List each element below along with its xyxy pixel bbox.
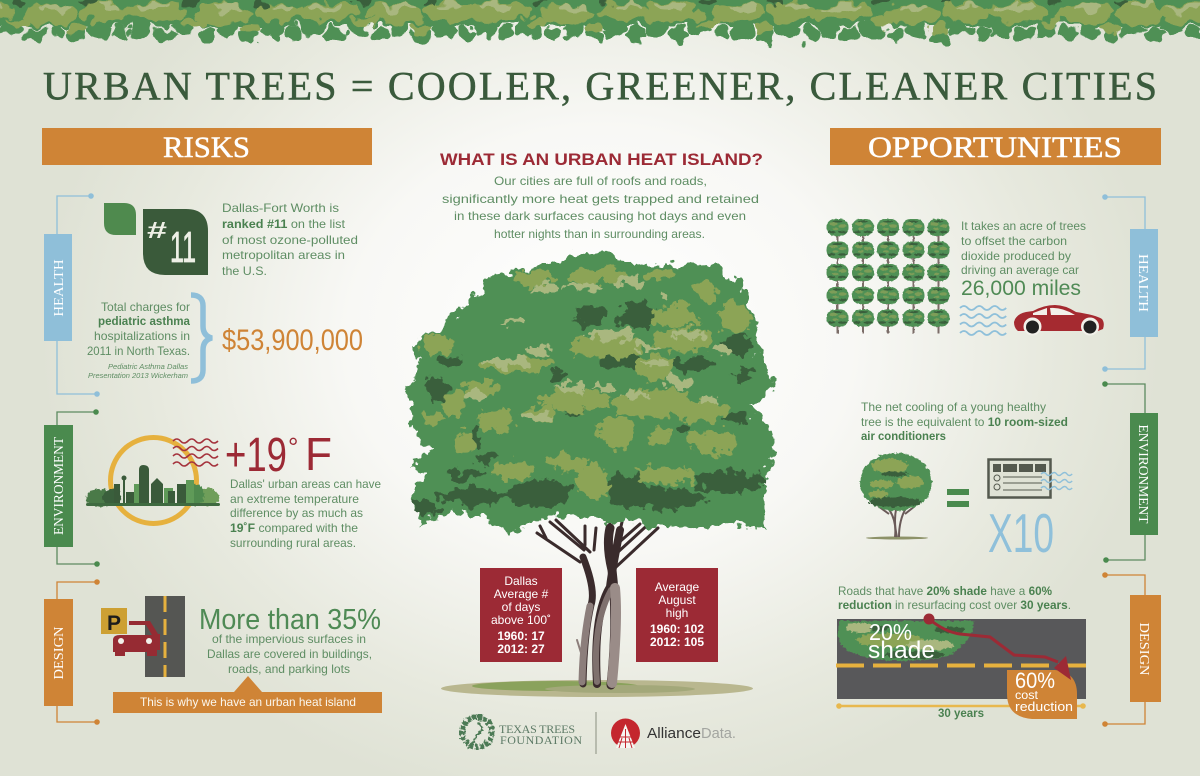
text: heat island explanation <box>442 174 759 241</box>
text: carbon offset <box>961 219 1086 277</box>
illustration: large tree <box>407 252 777 697</box>
chart: shaded road <box>836 614 1087 720</box>
text: asthma charges: Presentation 2013 Wickerham <box>88 371 188 380</box>
text: net cooling <box>861 400 1068 443</box>
text: temperature difference: an extreme temperature <box>230 492 359 506</box>
opportunities health bracket <box>1102 194 1158 372</box>
stat box: days above 100: 2012: 27 <box>497 642 545 656</box>
stat box: days above 100: above 100˚ <box>491 613 551 627</box>
heading: risks <box>42 128 372 165</box>
risks design bracket <box>44 579 100 725</box>
risks environment bracket <box>44 409 100 567</box>
text: asthma charges <box>87 300 190 380</box>
divider <box>595 712 597 754</box>
stat box: days above 100: Dallas <box>504 574 538 588</box>
text: asthma charges: 2011 in North Texas. <box>87 344 190 358</box>
stat box: days above 100: 1960: 17 <box>497 629 545 643</box>
text: ozone ranking: metropolitan areas in <box>222 248 345 262</box>
heading: opportunities: OPPORTUNITIES <box>868 131 1122 164</box>
icon: equals sign <box>947 489 969 507</box>
stat: asthma cost: $53,900,000 <box>222 324 363 357</box>
risks design bracket: DESIGN <box>52 626 67 680</box>
opportunities design bracket: DESIGN <box>1136 622 1151 676</box>
text: ozone ranking <box>222 201 358 278</box>
callout: heat island banner: This is why we have an urban heat island <box>140 695 356 709</box>
stat: temperature: F <box>305 428 332 480</box>
icon: grid of 25 trees <box>826 219 950 334</box>
text: ozone ranking: Dallas-Fort Worth is <box>222 201 339 215</box>
chart: shaded road: 20% <box>869 619 912 645</box>
text: carbon offset: It takes an acre of trees <box>961 219 1086 233</box>
text: heat island explanation: significantly more heat gets trapped and retained <box>442 192 759 206</box>
risks environment bracket: ENVIRONMENT <box>52 437 67 535</box>
logo: alliance data: Data. <box>701 725 736 742</box>
logo: alliance data <box>611 718 736 748</box>
text: road shade: Roads that have 20% shade have a 60% <box>838 584 1052 598</box>
risks health bracket: HEALTH <box>52 260 67 316</box>
icon: rank leaf: 11 <box>170 223 196 272</box>
stat: temperature: +19 <box>225 429 287 482</box>
text: carbon offset: to offset the carbon <box>961 234 1067 248</box>
text: temperature difference: Dallas' urban areas can have <box>230 477 381 491</box>
panel: urban heat island <box>407 151 777 754</box>
text: carbon offset: dioxide produced by <box>961 249 1071 263</box>
icon: young tree <box>860 453 932 540</box>
text: ozone ranking: of most ozone-polluted <box>222 233 358 247</box>
canopy <box>407 252 777 532</box>
text: ozone ranking: ranked #11 on the list <box>222 217 346 231</box>
stat box: average august high: 2012: 105 <box>650 635 704 649</box>
text: impervious surfaces: roads, and parking lots <box>228 662 350 676</box>
opportunities health bracket: HEALTH <box>1135 254 1150 312</box>
text: net cooling: tree is the equivalent to 10 room-sized <box>861 415 1068 429</box>
stat: times ten: X10 <box>988 502 1054 564</box>
icon: heat waves <box>173 439 218 466</box>
text: impervious surfaces <box>207 632 372 676</box>
text: temperature difference: 19˚F compared with the <box>230 521 358 535</box>
trunks <box>537 520 658 685</box>
text: impervious surfaces: Dallas are covered in buildings, <box>207 647 372 661</box>
logo: texas trees foundation: TEXAS TREES <box>499 722 575 736</box>
text: ozone ranking: the U.S. <box>222 264 267 278</box>
title: URBAN TREES = COOLER, GREENER, CLEANER CITIES <box>43 64 1157 108</box>
text: asthma charges: Pediatric Asthma Dallas <box>108 362 188 371</box>
stat box: days above 100 <box>480 568 562 662</box>
text: road shade: reduction in resurfacing cost over 30 years. <box>838 598 1071 612</box>
icon: red car <box>1014 305 1104 336</box>
opportunities design bracket <box>1102 572 1161 727</box>
icon: road and parking: P <box>107 612 121 635</box>
text: asthma charges: pediatric asthma <box>98 314 190 328</box>
stat box: average august high: high <box>666 606 688 620</box>
panel: opportunities <box>826 128 1161 727</box>
icon: rank leaf: # <box>147 217 167 243</box>
risks health bracket <box>44 193 100 397</box>
text: road shade <box>838 584 1071 612</box>
chart: shaded road: reduction <box>1015 699 1073 714</box>
opportunities environment bracket <box>1102 381 1158 563</box>
opportunities environment bracket: ENVIRONMENT <box>1135 424 1150 524</box>
stat: impervious share: More than 35% <box>199 604 381 636</box>
chart: shaded road: cost <box>1015 688 1039 702</box>
text: asthma charges: hospitalizations in <box>94 329 190 343</box>
foliage border <box>0 0 1200 44</box>
text: net cooling: The net cooling of a young healthy <box>861 400 1046 414</box>
stat box: days above 100: of days <box>502 600 540 614</box>
callout: heat island banner <box>113 676 382 713</box>
stat box: average august high <box>636 568 718 662</box>
panel: risks <box>42 128 382 725</box>
icon: road and parking <box>101 596 185 677</box>
stat box: average august high: Average <box>655 580 700 594</box>
text: temperature difference <box>230 477 381 550</box>
icon: air conditioner <box>988 460 1072 498</box>
text: heat island explanation: hotter nights than in surrounding areas. <box>494 227 705 241</box>
text: temperature difference: difference by as much as <box>230 506 363 520</box>
stat: temperature: ° <box>288 432 298 462</box>
text: temperature difference: surrounding rural areas. <box>230 536 356 550</box>
chart: shaded road: 30 years <box>938 708 984 720</box>
text: heat island explanation: Our cities are full of roofs and roads, <box>494 174 707 188</box>
icon: exhaust waves <box>960 306 1006 335</box>
icon: skyline in heat circle <box>86 438 220 524</box>
tree shade <box>838 621 974 661</box>
chart: shaded road: 60% <box>1015 668 1055 693</box>
chart: shaded road: shade <box>868 637 935 664</box>
logo: alliance data: Alliance <box>647 725 701 742</box>
text: impervious surfaces: of the impervious surfaces in <box>212 632 366 646</box>
stat: miles: 26,000 miles <box>961 277 1081 300</box>
stat box: average august high: 1960: 102 <box>650 622 704 636</box>
stat box: days above 100: Average # <box>494 587 549 601</box>
stat box: average august high: August <box>658 593 696 607</box>
icon: rank leaf <box>104 203 208 275</box>
text: carbon offset: driving an average car <box>961 263 1079 277</box>
heading: risks: RISKS <box>163 131 250 164</box>
text: net cooling: air conditioners <box>861 429 946 443</box>
text: heat island explanation: in these dark surfaces causing hot days and even <box>454 209 746 223</box>
logo: texas trees foundation <box>462 717 582 747</box>
heading: opportunities <box>830 128 1161 165</box>
ground <box>441 680 753 697</box>
text: asthma charges: Total charges for <box>101 300 190 314</box>
logo: texas trees foundation: FOUNDATION <box>500 733 582 747</box>
icon: brace <box>191 295 212 381</box>
heading: heat island: WHAT IS AN URBAN HEAT ISLAND? <box>440 151 763 169</box>
